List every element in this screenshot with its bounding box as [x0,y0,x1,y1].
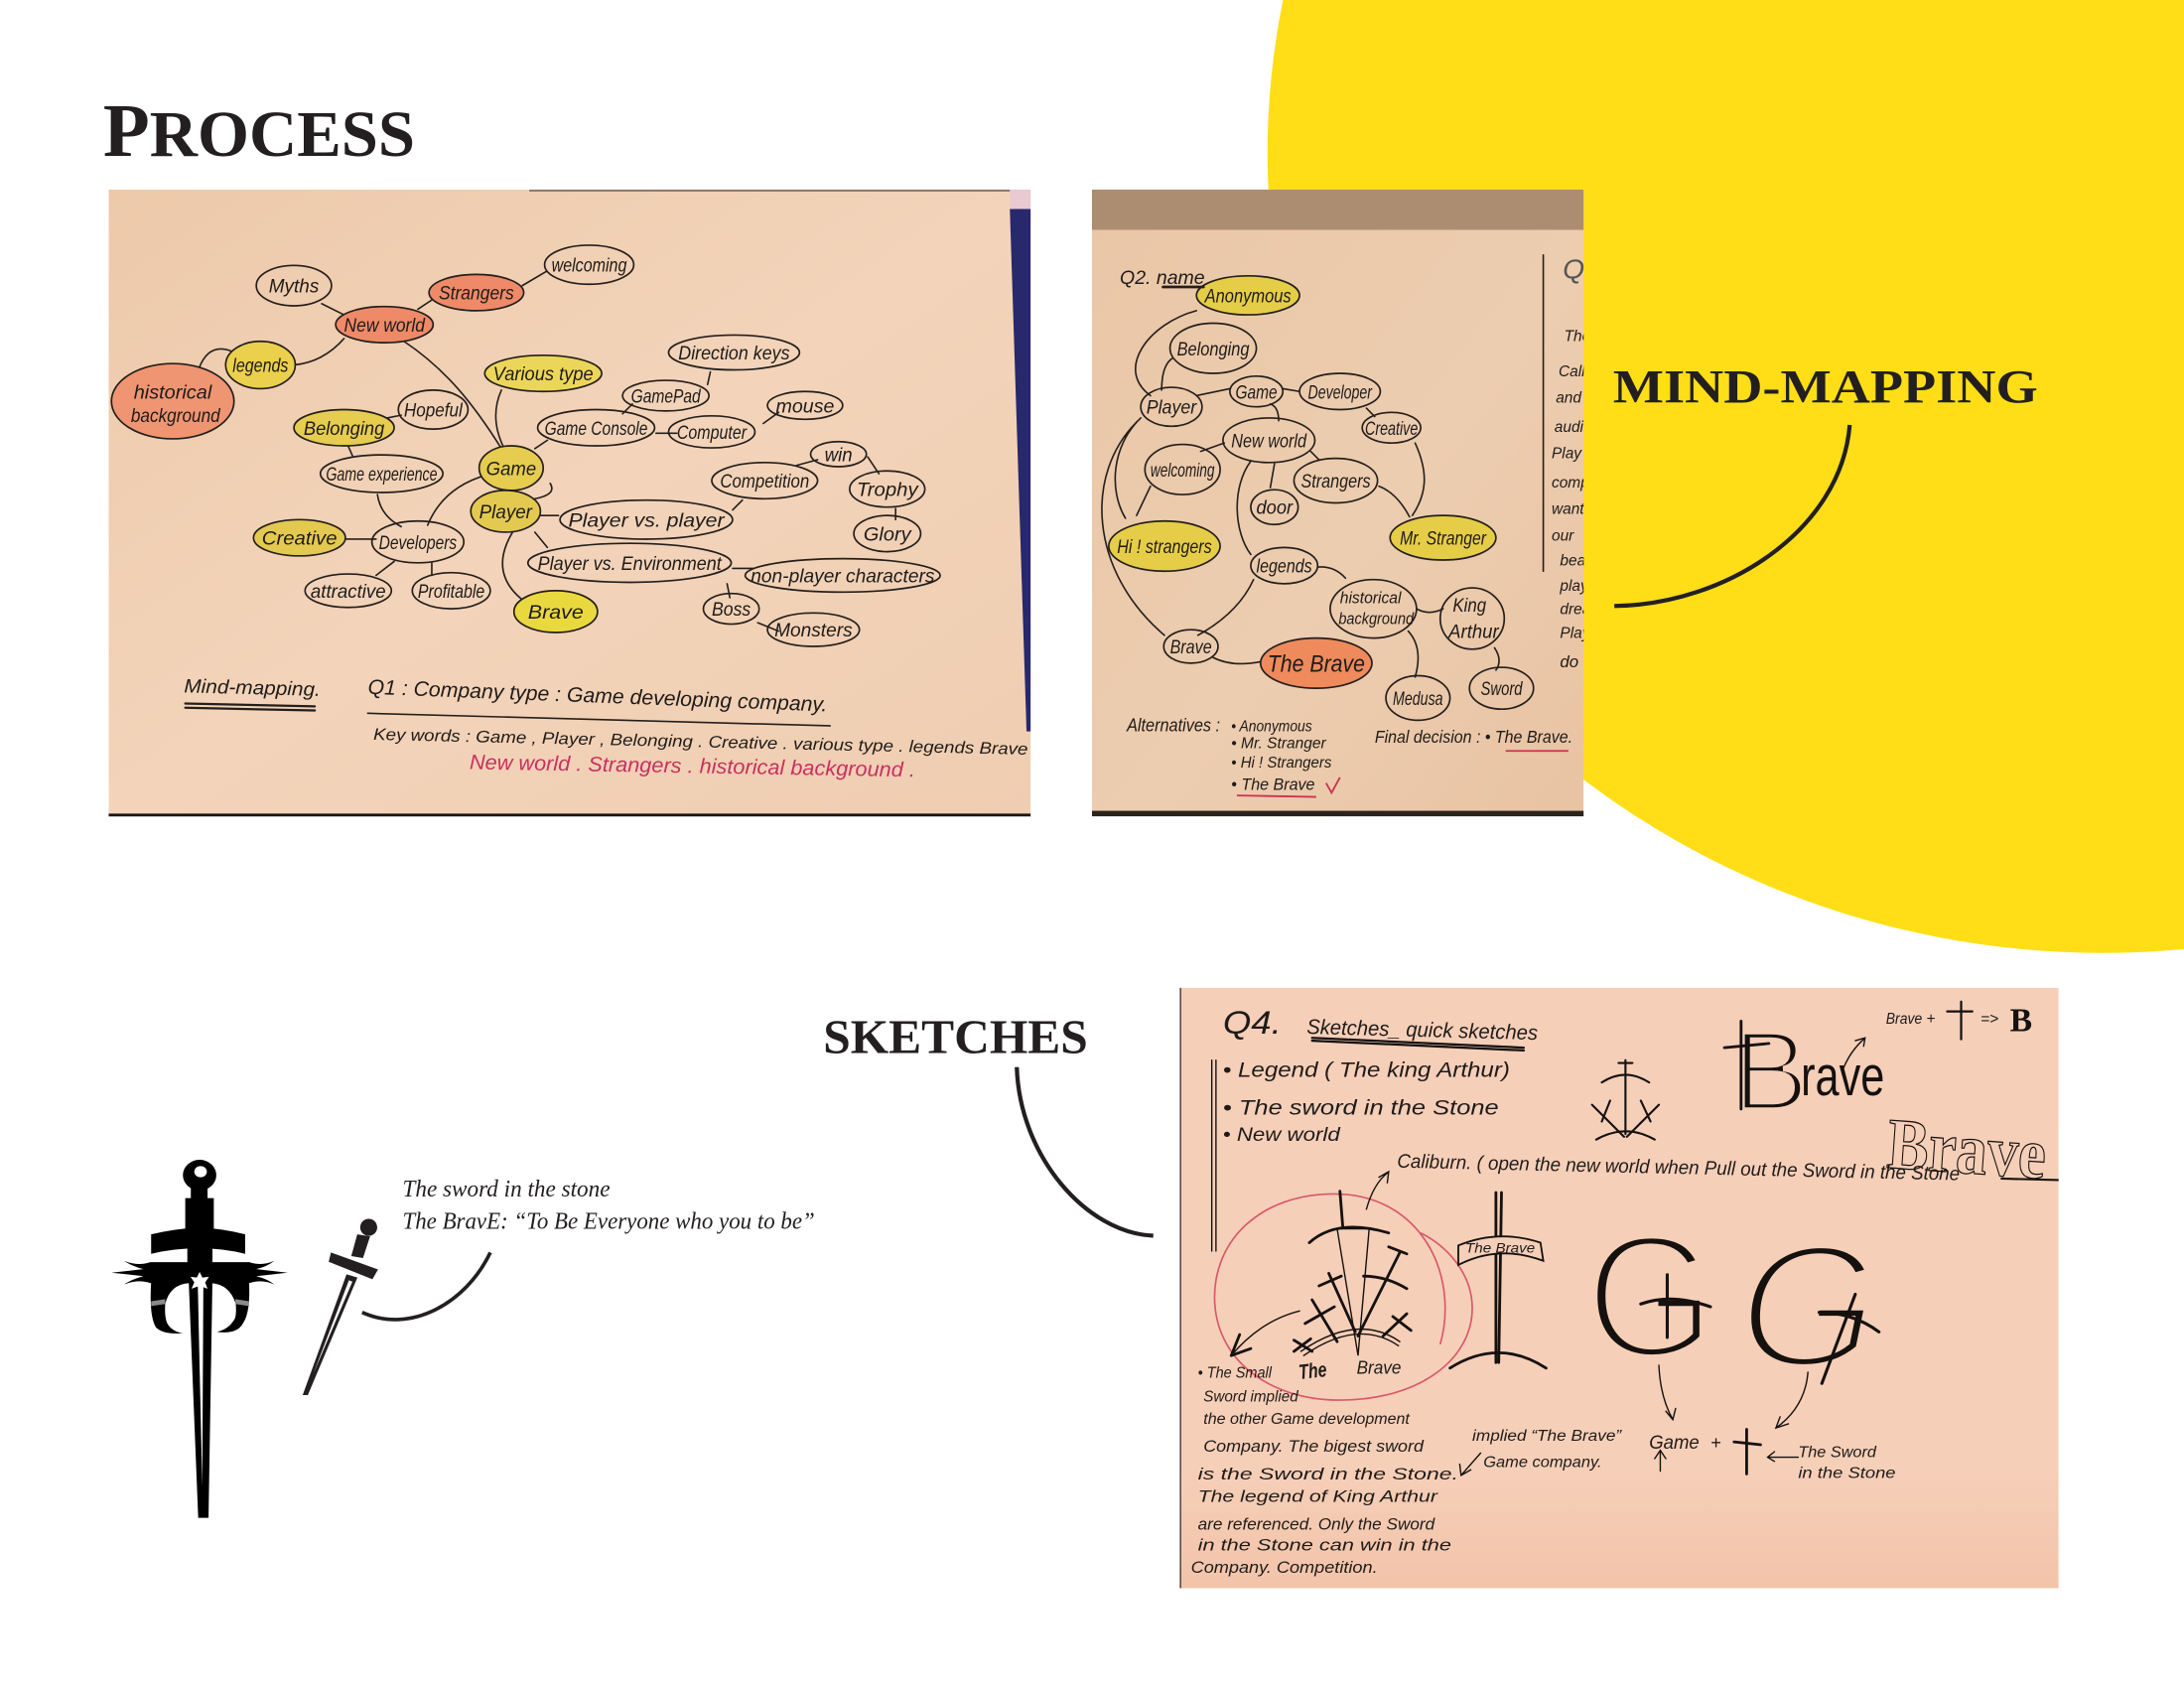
big Brave lettering: B [1732,1008,1809,1135]
alternatives list: • Hi ! Strangers [1231,755,1332,772]
mind-map nodes: Game experience [326,464,438,486]
big Brave lettering: rave [1801,1045,1884,1107]
name-map nodes: Mr. Stranger [1400,528,1487,550]
sketch heading [1225,1011,1538,1052]
quote: the sword in the stone: The sword in the stone [402,1177,611,1202]
name-map nodes: The Brave [1268,650,1365,677]
sheet one notes: New world . Strangers . historical background . [470,751,915,781]
photo: mind-map sheet one [108,190,1030,817]
arrow curve: sketches [1017,1067,1154,1236]
sketch: slanted letter G with sword [1751,1248,1880,1385]
sheet one notes [184,675,1028,781]
name-map nodes: legends [1257,556,1312,578]
name-map nodes: Brave [1170,636,1212,658]
alternatives list: Alternatives : [1126,715,1220,736]
alternatives list: • Mr. Stranger [1231,735,1327,752]
mind-map nodes: background [131,405,221,427]
name-map nodes: door [1257,497,1294,519]
mind-map nodes: Strangers [439,283,514,305]
partial next column on sheet two: want [1552,501,1584,518]
mind-map nodes: Player vs. Environment [538,553,723,575]
mind-map nodes: Profitable [418,581,484,603]
partial next column on sheet two: bear [1560,553,1591,570]
name-map nodes: welcoming [1151,460,1215,482]
sketch: swords logo in circle: Brave [1357,1356,1401,1377]
sketch: long explanation note: • The Small [1198,1365,1273,1382]
red circle around logo [1214,1194,1472,1400]
alternatives list: • Anonymous [1231,719,1312,736]
mind-map nodes: Myths [269,276,319,298]
sketch: Game plus sword formula: in the Stone [1798,1466,1896,1482]
Q2 heading: Q2. name [1120,267,1205,289]
arrow curve: mind-mapping [1614,425,1849,606]
name-map nodes: Player [1147,397,1198,419]
quote: the sword in the stone [402,1177,815,1234]
sketch: Game plus sword formula [1649,1430,1896,1482]
small sword emblem sketch [1592,1060,1659,1140]
mind-map nodes: Computer [677,422,748,444]
mind-map nodes: Boss [712,599,751,621]
sketch: banner sword [1450,1193,1546,1368]
partial next column on sheet two: our [1552,527,1574,544]
mind-map nodes: Game [486,458,536,480]
mind-map nodes: Various type [493,363,594,385]
label: Mind-mapping: MIND-MAPPING [1613,360,2038,413]
sketch: long explanation note: is the Sword in the Stone. [1198,1465,1458,1483]
mind-map connector lines [200,272,895,632]
name-map nodes: Belonging [1177,339,1250,360]
sketch: long explanation note: Sword implied [1203,1388,1298,1405]
name-map connector lines [1102,311,1499,677]
name-map nodes: Medusa [1393,688,1443,710]
partial next column on sheet two: Play [1560,626,1591,642]
name-map nodes: Strangers [1300,471,1371,492]
partial next column on sheet two: and [1556,389,1581,406]
mind-map nodes: Competition [720,471,809,492]
formula: Brave plus sword: => [1980,1011,1998,1028]
mind-map nodes: historical [134,381,212,403]
name-map nodes: Sword [1480,678,1523,700]
sketch: banner sword: The Brave [1465,1239,1535,1255]
partial next column on sheet two: company [1552,475,1615,492]
name-map nodes: New world [1231,430,1307,452]
mind-map nodes: Monsters [774,620,853,641]
mind-map nodes: Player [479,501,533,523]
alternatives list: • The Brave [1231,775,1314,794]
sketch: swords logo in circle [1231,1172,1411,1384]
sketch heading: Q4. [1223,1005,1282,1041]
sketch: implied note: Game company. [1483,1453,1602,1471]
partial next column on sheet two: Q [1563,254,1584,285]
name-map nodes: historical [1340,589,1403,608]
mind-map nodes: Hopeful [404,400,463,422]
sketch: Game plus sword formula: + [1710,1432,1721,1453]
name-map nodes: Developer [1307,381,1373,403]
partial next column on sheet two: Play [1552,446,1582,463]
Caliburn note: Caliburn. ( open the new world when Pull out the Sword in the Stone [1397,1151,1960,1186]
mind-map nodes: Brave [528,602,584,624]
alternatives list [1126,715,1340,797]
sketch bullet notes [1212,1059,1510,1251]
label: Sketches: SKETCHES [823,1010,1088,1064]
formula: Brave plus sword: B [2010,1002,2032,1039]
sketch: long explanation note: The legend of King Arthur [1198,1486,1439,1505]
sketch: long explanation note: Company. The bigest sword [1203,1437,1425,1456]
mind-map nodes: mouse [776,395,835,417]
photo: mind-map sheet two [1092,190,1616,816]
mind-map nodes [111,245,940,646]
name-map nodes: Game [1236,381,1278,403]
icon: small sword [303,1219,378,1395]
arrow curve: quote [362,1252,490,1320]
big Brave lettering [1723,1020,1882,1110]
sketch arrows [1459,1365,1808,1476]
partial next column on sheet two: dream [1560,602,1603,619]
mind-map nodes: attractive [311,581,386,603]
final decision: Final decision : • The Brave. [1375,727,1572,747]
sketch: long explanation note: the other Game development [1203,1411,1411,1428]
mind-map nodes: Trophy [857,479,919,500]
sketch: letter G with sword: G [1585,1199,1716,1395]
partial next column on sheet two: Called [1559,363,1602,380]
icon: large sword logo [111,1160,288,1518]
mind-map nodes: welcoming [552,255,626,277]
mind-map nodes: Game Console [545,418,647,440]
sheet one notes: Mind-mapping. [184,675,321,701]
sheet one notes: Key words : Game , Player , Belonging . Creative . various type . legends Brave [373,725,1028,759]
sketch: implied note [1472,1427,1622,1471]
name-map nodes [1109,276,1534,720]
sheet one notes: Q1 : Company type : Game developing company. [367,676,828,716]
sketch: Game plus sword formula: The Sword [1798,1445,1876,1462]
sketch: slanted letter G with sword: G [1738,1208,1877,1404]
name-map nodes: background [1338,610,1415,629]
formula: Brave plus sword: Brave [1886,1011,1922,1028]
sketch: long explanation note: in the Stone can win in the [1198,1536,1451,1555]
sketch heading: Sketches_ quick sketches [1306,1016,1539,1045]
name-map nodes: King [1452,595,1486,617]
sketch: long explanation note: are referenced. Only the Sword [1198,1515,1435,1534]
mind-map nodes: legends [232,355,289,377]
partial next column on sheet two: do [1560,652,1578,671]
quote: the sword in the stone: The BravE: “To Be Everyone who you to be” [402,1208,815,1234]
photo: logo sketches [1179,988,2059,1588]
outlined Brave lettering: Brave [1885,1103,2049,1195]
sketch bullet notes: • The sword in the Stone [1223,1096,1499,1119]
mind-map nodes: win [825,444,853,466]
sketch: Game plus sword formula: Game [1649,1432,1700,1454]
mind-map nodes: Developers [379,532,457,554]
name-map nodes: Anonymous [1204,285,1292,307]
mind-map nodes: Player vs. player [568,509,726,531]
sketch: swords logo in circle: The [1297,1358,1328,1384]
title: Process: PROCESS [103,89,415,173]
mind-map nodes: Creative [262,528,338,550]
yellow circle background [1268,0,2184,953]
formula: Brave plus sword: + [1926,1011,1935,1028]
sketch bullet notes: • Legend ( The king Arthur) [1223,1059,1510,1082]
name-map nodes: Creative [1365,418,1418,440]
sketch bullet notes: • New world [1223,1124,1341,1146]
partial next column on sheet two: play [1559,578,1589,595]
mind-map nodes: non-player characters [751,565,935,587]
mind-map nodes: Glory [864,523,912,545]
sketch: letter G with sword [1597,1238,1711,1354]
name-map nodes: Arthur [1447,622,1500,643]
partial next column on sheet two: audience [1555,419,1616,436]
mind-map nodes: Belonging [304,418,384,440]
mind-map nodes: Direction keys [678,343,790,364]
mind-map nodes: GamePad [631,385,702,407]
mind-map nodes: New world [344,315,426,337]
partial next column on sheet two [1543,254,1584,667]
sketch: long explanation note [1191,1365,1458,1577]
sketch: implied note: implied “The Brave” [1472,1427,1622,1445]
partial next column on sheet two: The [1565,329,1590,346]
formula: Brave plus sword [1886,1002,2032,1040]
sketch: long explanation note: Company. Competition. [1191,1558,1378,1577]
name-map nodes: Hi ! strangers [1117,536,1212,558]
